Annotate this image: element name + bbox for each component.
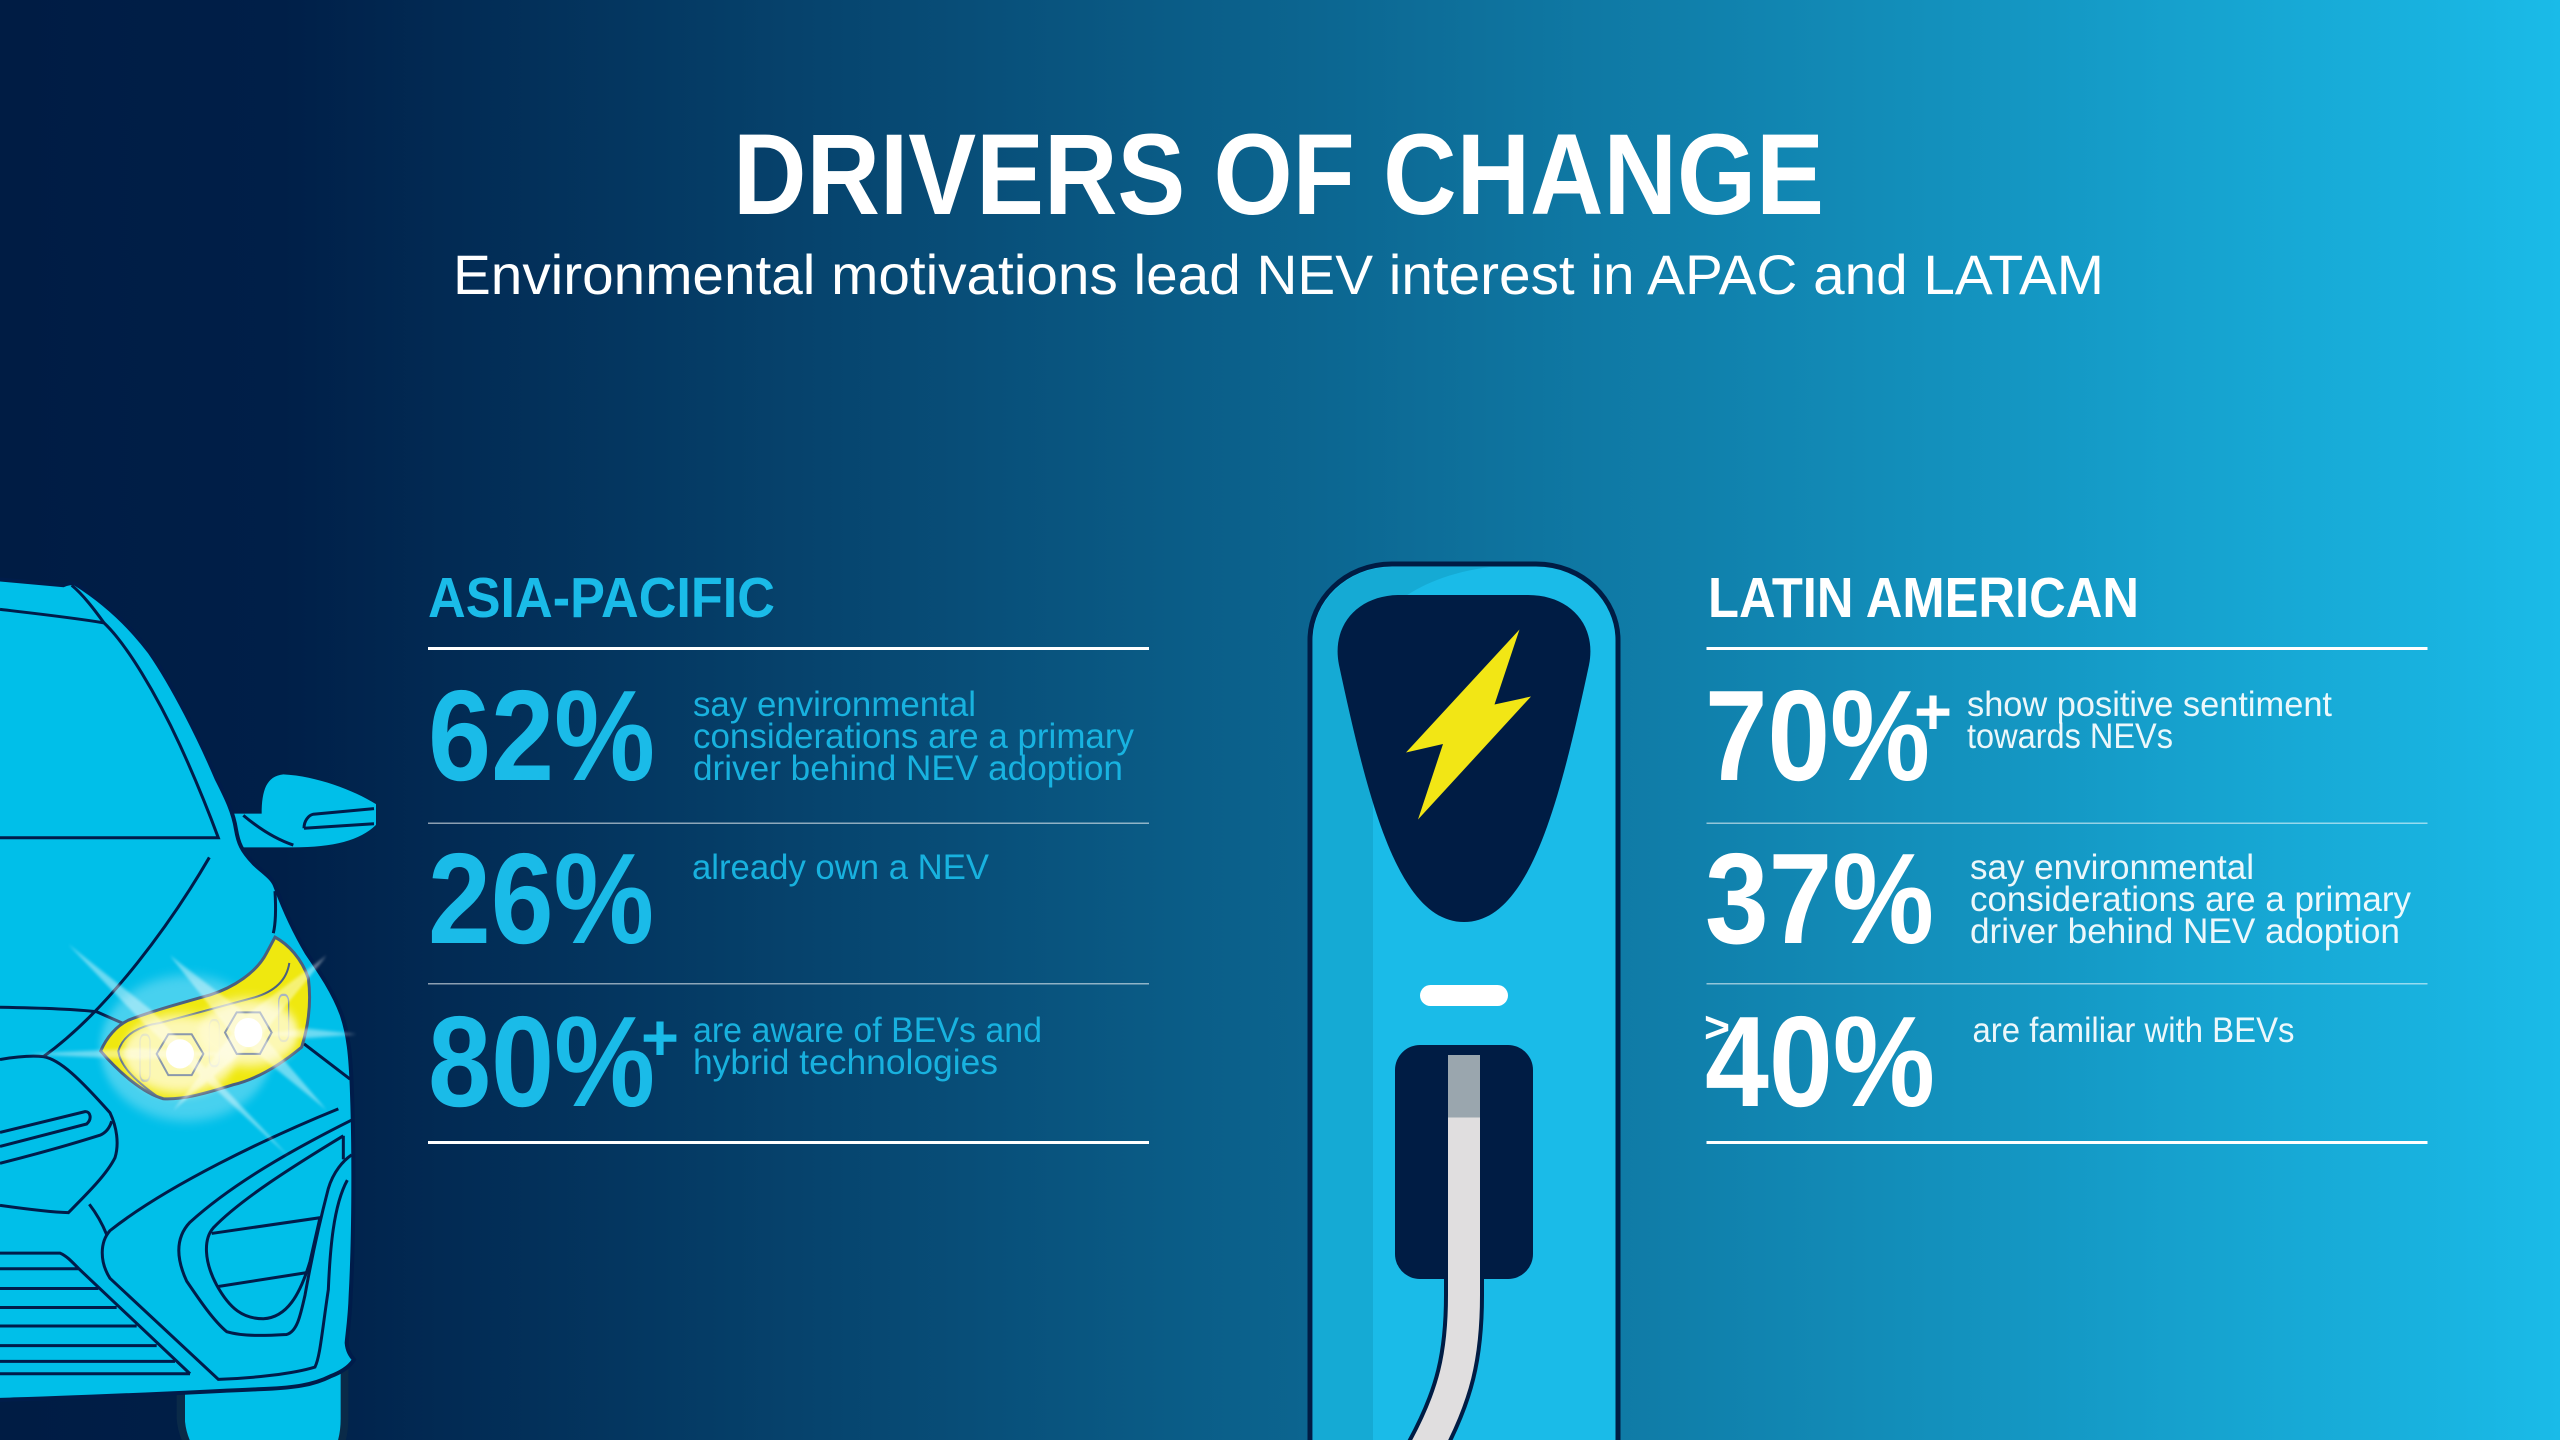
charger body [1310, 564, 1618, 1440]
text: 37% description: considerations are a primary [1970, 880, 2411, 919]
charging cable [1425, 1117, 1464, 1440]
illustration: car front [0, 579, 376, 1440]
text: 80%+ description: hybrid technologies [693, 1043, 998, 1082]
car mirror [233, 774, 376, 847]
text: 37% description [1970, 848, 2411, 951]
panel: Asia-Pacific [428, 566, 1149, 1144]
panel: Latin American [1704, 566, 2428, 1144]
text: 62% description: say environmental [693, 685, 976, 724]
text: 70%+ description: towards NEVs [1967, 717, 2173, 756]
divider: heading rule [428, 647, 1149, 650]
text: 37% description: driver behind NEV adoption [1970, 912, 2400, 951]
text: 62% description: driver behind NEV adoption [693, 749, 1123, 788]
car outline details [0, 585, 352, 1379]
charger screen [1338, 595, 1590, 922]
stat: 80%+: 80% [428, 990, 655, 1134]
charging plug [1448, 1055, 1480, 1118]
stat: 37%: 37% [1705, 827, 1934, 971]
headlight glow [100, 975, 273, 1121]
charger side shade [1313, 567, 1490, 1440]
stat: 26%: 26% [428, 827, 654, 971]
car body [0, 579, 354, 1400]
illustration: EV charger [1310, 564, 1618, 1440]
status light [1420, 985, 1508, 1006]
text: 26% description: already own a NEV [692, 848, 990, 887]
headlight [101, 937, 310, 1099]
stat: 70%+: 70% [1705, 664, 1930, 808]
text: 62% description: considerations are a primary [693, 717, 1134, 756]
text: 80%+ description [693, 1011, 1042, 1082]
text: 70%+ description [1967, 685, 2332, 756]
stat: 80%+: + [641, 1000, 679, 1074]
text: >40% description: are familiar with BEVs [1972, 1011, 2294, 1050]
text: 80%+ description: are aware of BEVs and [693, 1011, 1042, 1050]
headlight flares [27, 944, 357, 1158]
text: 62% description [693, 685, 1134, 788]
title: DRIVERS OF CHANGE [733, 111, 1824, 239]
charger socket [1395, 1045, 1533, 1279]
stat: 62%: 62% [428, 664, 655, 808]
icon: lightning bolt [1406, 630, 1531, 820]
text: 37% description: say environmental [1970, 848, 2254, 887]
stat: >40%: > [1704, 1003, 1730, 1052]
stat: 70%+: + [1914, 674, 1952, 748]
stat: >40%: 40% [1705, 990, 1935, 1134]
car wheel [177, 1363, 348, 1440]
subtitle: Environmental motivations lead NEV interest in APAC and LATAM [453, 243, 2104, 306]
text: 70%+ description: show positive sentiment [1967, 685, 2332, 724]
heading: Latin American: LATIN AMERICAN [1708, 566, 2139, 630]
heading: Asia-Pacific: ASIA-PACIFIC [428, 566, 775, 630]
